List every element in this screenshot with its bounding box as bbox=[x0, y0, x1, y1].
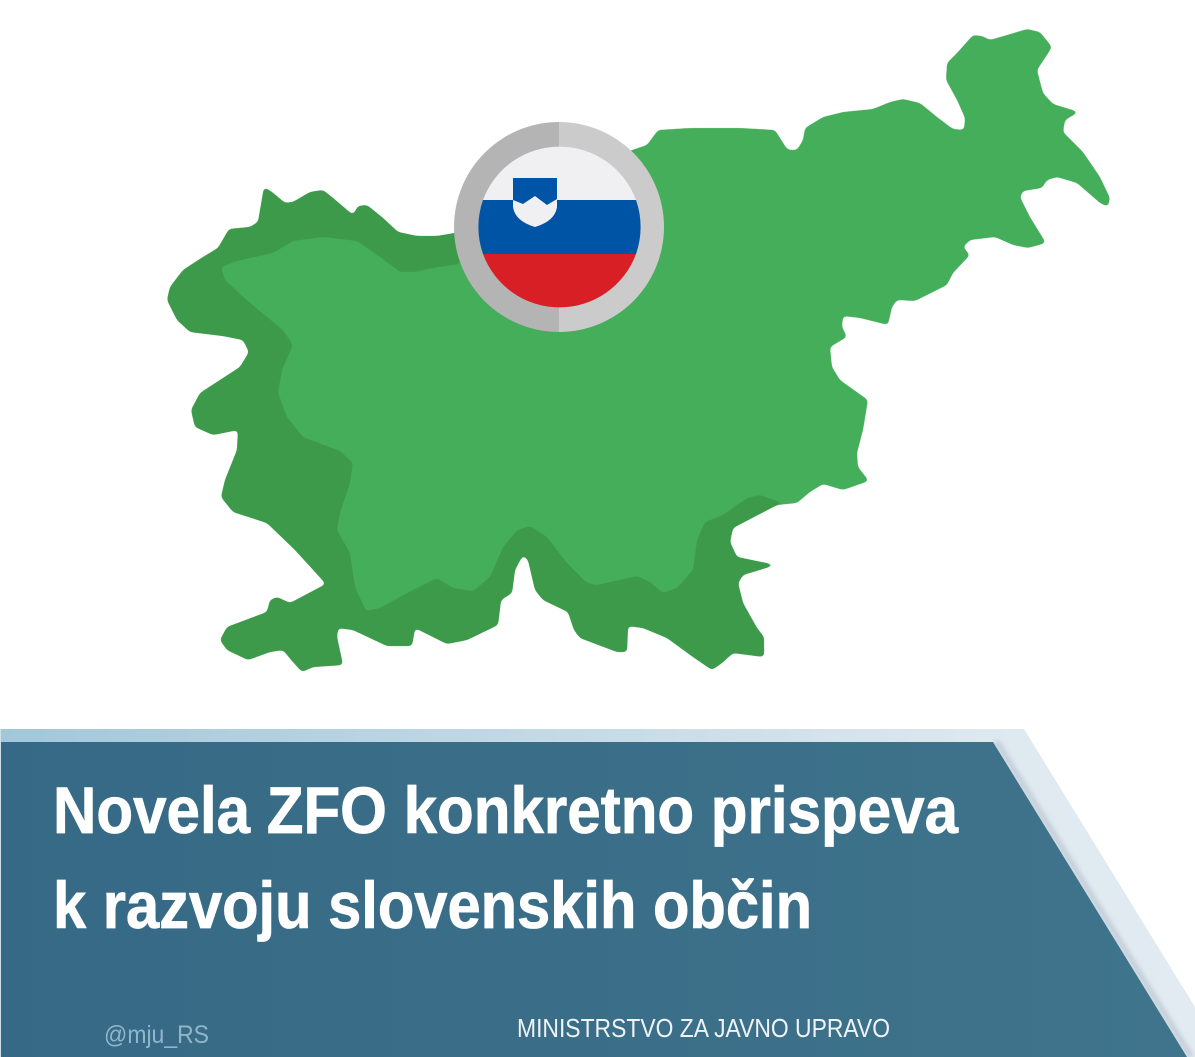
shield blue top with mountain bbox=[513, 178, 557, 205]
title line 1: Novela ZFO konkretno prispeva bbox=[53, 773, 959, 847]
panel: title banner bbox=[0, 729, 1195, 1057]
light top and diagonal band bbox=[0, 729, 1195, 1057]
badge ring right half bbox=[559, 122, 664, 332]
title line 2: k razvoju slovenskih občin bbox=[53, 868, 812, 942]
social handle: @mju_RS bbox=[104, 1021, 209, 1049]
shield white base bbox=[513, 196, 557, 227]
icon: Slovenian flag badge bbox=[454, 122, 664, 332]
diagonal edge shadow bbox=[996, 741, 1191, 1057]
flag disc bbox=[478, 147, 641, 307]
coat of arms shield bbox=[513, 178, 557, 227]
flag red stripe bbox=[483, 254, 636, 307]
left edge bbox=[0, 729, 1, 1057]
dark panel body bbox=[1, 742, 1187, 1057]
map: darker western and southern border region bbox=[167, 188, 780, 671]
map: base territory bbox=[167, 29, 1110, 672]
flag blue stripe bbox=[478, 200, 641, 254]
badge ring left half bbox=[454, 122, 559, 332]
map of Slovenia bbox=[167, 29, 1110, 671]
flag white stripe bbox=[483, 147, 636, 200]
ministry name: MINISTRSTVO ZA JAVNO UPRAVO bbox=[517, 1013, 890, 1043]
